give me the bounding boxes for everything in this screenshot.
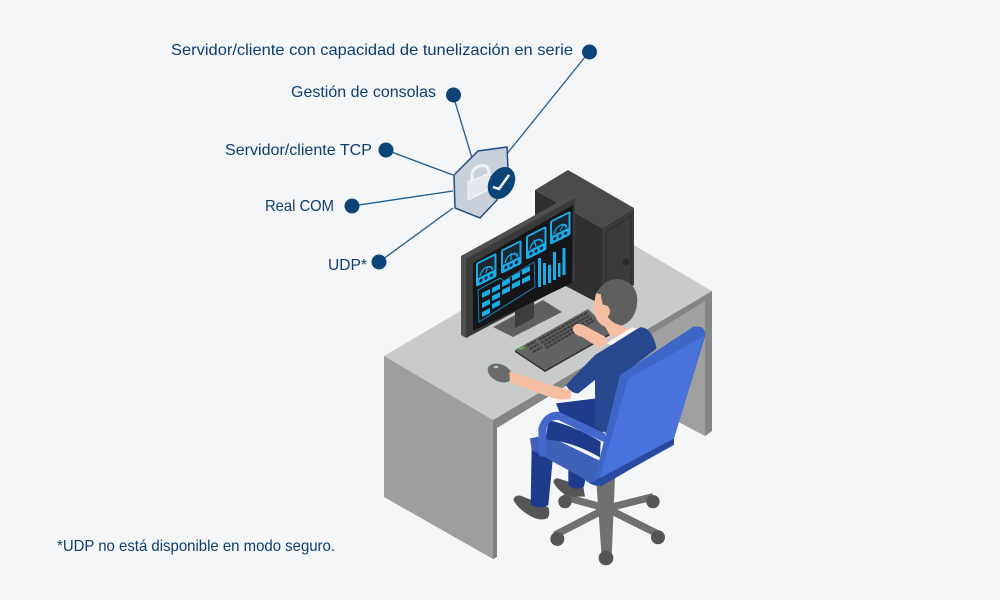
icon: security shield with lock and check — [454, 147, 521, 218]
chair seat and backrest — [530, 326, 705, 486]
desk — [384, 227, 712, 559]
dashboard gauges — [476, 211, 570, 287]
connector dots — [344, 44, 597, 270]
legs — [531, 447, 586, 507]
connector lines — [352, 52, 589, 262]
lock — [468, 166, 490, 200]
label: TCP: Servidor/cliente TCP — [225, 142, 372, 159]
label: Real COM: Real COM — [265, 198, 334, 215]
label: UDP: UDP* — [328, 257, 367, 274]
monitor stand — [493, 290, 562, 337]
arm skin — [509, 372, 572, 400]
footnote: *UDP no está disponible en modo seguro. — [57, 538, 335, 555]
shoes — [513, 478, 585, 519]
mouse — [485, 360, 515, 386]
label: console management: Gestión de consolas — [291, 84, 436, 101]
head — [593, 279, 637, 338]
check badge — [482, 162, 521, 204]
monitor — [461, 193, 575, 338]
computer tower — [535, 170, 634, 305]
office chair base — [550, 477, 665, 565]
seated man — [509, 279, 657, 519]
keyboard — [515, 309, 612, 372]
torso and arm — [509, 324, 657, 437]
dashboard bar chart — [538, 248, 566, 287]
label: serial tunneling: Servidor/cliente con capacidad de tunelización en serie — [171, 42, 573, 59]
dashboard buttons — [478, 262, 535, 322]
